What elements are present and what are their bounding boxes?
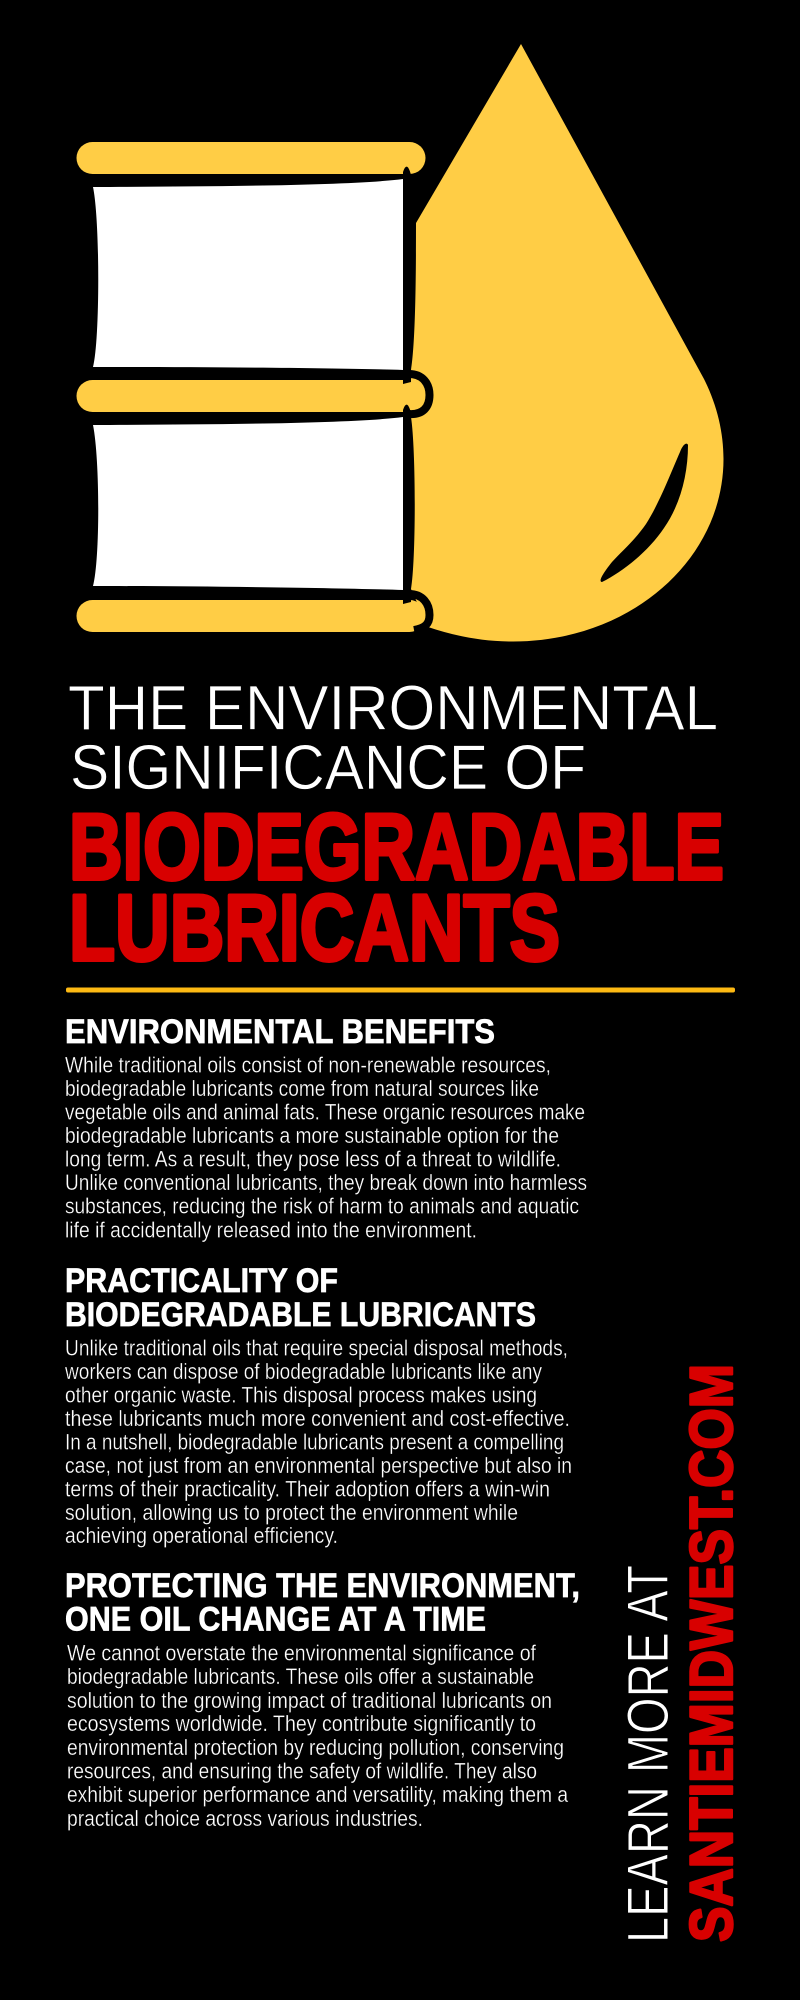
barrel upper seam xyxy=(403,167,411,384)
body text: practical choice across various industries. xyxy=(67,1806,423,1831)
body text: other organic waste. This disposal process makes using xyxy=(65,1382,537,1408)
section: protecting the environment xyxy=(65,1567,580,1831)
heading xyxy=(65,1567,580,1638)
body text: biodegradable lubricants come from natural sources like xyxy=(65,1076,539,1101)
barrel middle rim xyxy=(76,380,426,412)
section: practicality xyxy=(64,1262,572,1548)
body text: workers can dispose of biodegradable lubricants like any xyxy=(64,1359,542,1384)
heading: ENVIRONMENTAL BENEFITS xyxy=(65,1013,495,1051)
illustration: oil barrel and drop xyxy=(76,44,724,642)
body text: Unlike conventional lubricants, they break down into harmless xyxy=(65,1170,587,1195)
title highlight line 2: LUBRICANTS xyxy=(69,875,560,980)
barrel upper panel xyxy=(93,179,403,370)
body text: biodegradable lubricants. These oils offer a sustainable xyxy=(67,1664,534,1689)
body text: exhibit superior performance and versatility, making them a xyxy=(67,1782,569,1807)
body text xyxy=(64,1336,572,1548)
barrel bottom rim xyxy=(76,600,426,632)
barrel bottom hook xyxy=(409,594,430,630)
heading: BIODEGRADABLE LUBRICANTS xyxy=(65,1296,536,1334)
body text: long term. As a result, they pose less of a threat to wildlife. xyxy=(65,1146,561,1172)
body text: terms of their practicality. Their adoption offers a win-win xyxy=(65,1476,550,1502)
body text: solution to the growing impact of traditional lubricants on xyxy=(67,1688,552,1713)
body text: environmental protection by reducing pollution, conserving xyxy=(67,1735,564,1760)
section: environmental benefits xyxy=(65,1013,587,1242)
heading: PRACTICALITY OF xyxy=(65,1262,338,1300)
body text: solution, allowing us to protect the environment while xyxy=(65,1500,518,1525)
body text: We cannot overstate the environmental significance of xyxy=(67,1640,537,1666)
body text: achieving operational efficiency. xyxy=(65,1523,338,1548)
body text: life if accidentally released into the environment. xyxy=(65,1218,477,1242)
learn more label: LEARN MORE AT xyxy=(616,1565,681,1943)
heading xyxy=(65,1262,536,1334)
yellow divider rule xyxy=(66,988,735,992)
title line 1: THE ENVIRONMENTAL xyxy=(68,674,718,744)
body text: ecosystems worldwide. They contribute significantly to xyxy=(67,1711,536,1736)
body text: resources, and ensuring the safety of wildlife. They also xyxy=(67,1758,537,1784)
barrel middle hook xyxy=(409,374,430,414)
body text: biodegradable lubricants a more sustainable option for the xyxy=(65,1123,559,1148)
body text: Unlike traditional oils that require special disposal methods, xyxy=(65,1336,568,1360)
body text xyxy=(65,1052,587,1242)
heading: ONE OIL CHANGE AT A TIME xyxy=(65,1600,486,1638)
icon: drop highlight xyxy=(601,444,688,582)
heading: PROTECTING THE ENVIRONMENT, xyxy=(65,1567,580,1605)
icon: oil drop xyxy=(411,44,724,642)
body text: case, not just from an environmental perspective but also in xyxy=(65,1453,572,1478)
body text: substances, reducing the risk of harm to animals and aquatic xyxy=(65,1194,579,1218)
website address: SANTIEMIDWEST.COM xyxy=(678,1364,745,1942)
body text: While traditional oils consist of non-renewable resources, xyxy=(65,1052,551,1078)
body text: these lubricants much more convenient and cost-effective. xyxy=(65,1406,570,1431)
vertical call to action xyxy=(616,1364,745,1943)
body text xyxy=(67,1640,569,1831)
body text: In a nutshell, biodegradable lubricants present a compelling xyxy=(65,1430,564,1454)
title line 2: SIGNIFICANCE OF xyxy=(70,733,586,803)
body text: vegetable oils and animal fats. These organic resources make xyxy=(65,1100,585,1124)
barrel lower panel xyxy=(93,417,403,590)
barrel lower seam xyxy=(403,405,411,604)
title xyxy=(68,674,724,980)
barrel top rim xyxy=(76,142,426,174)
